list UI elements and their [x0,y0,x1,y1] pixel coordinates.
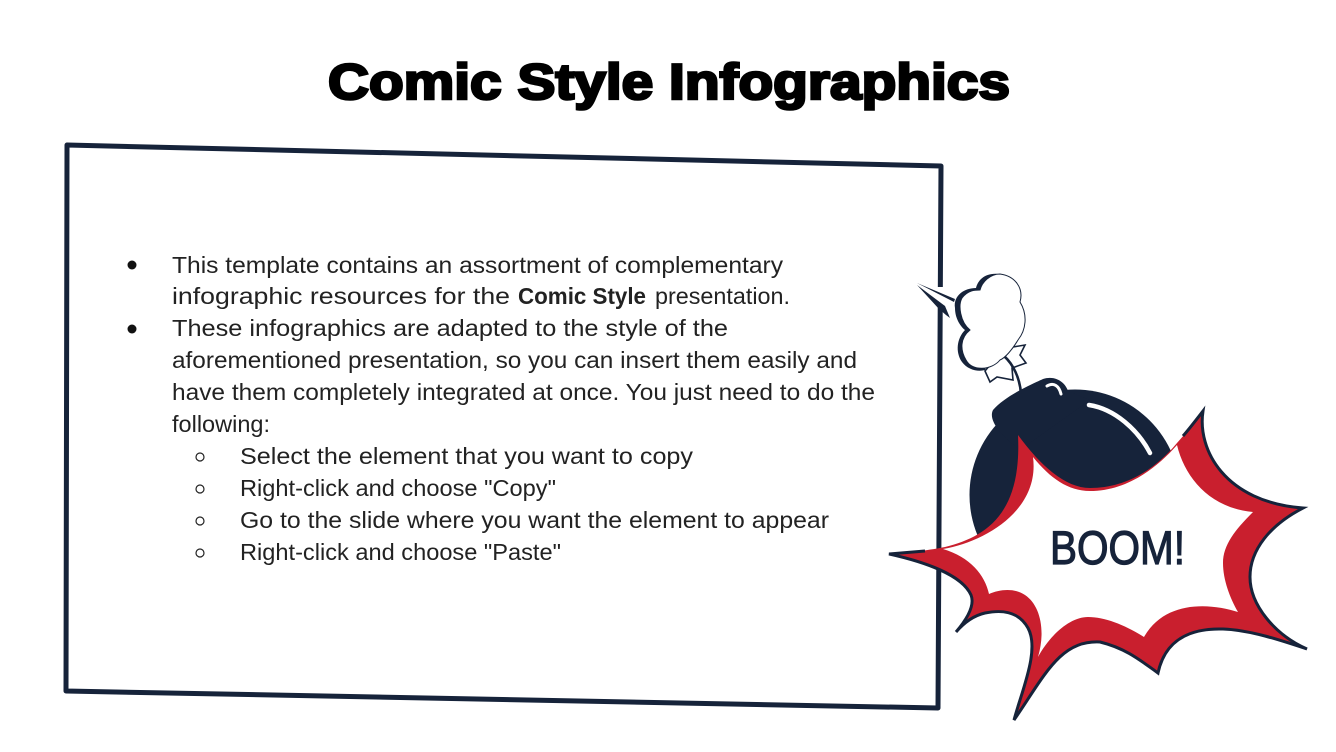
bullet 2 line 3: have them completely integrated at once. You just need to do the [172,379,875,405]
bullet 2 line 2: aforementioned presentation, so you can insert them easily and [172,347,857,373]
bullet 1 [128,260,136,270]
bullet 2 [128,324,136,334]
sub bullet 1: Select the element that you want to copy [240,443,694,469]
icon: fuse [1004,356,1021,394]
icon: smoke cloud [955,274,1025,371]
highlight: body [1089,405,1150,453]
icon: bomb body [970,378,1180,600]
bullet 1 line 1: This template contains an assortment of complementary [172,252,784,278]
bullet 2 line 4: following: [172,411,270,437]
explosion burst: white centre [943,445,1253,657]
sub bullet 2: Right-click and choose "Copy" [240,475,556,501]
icon: spark lines [917,283,955,318]
bullet 1 line 2: presentation. [655,283,790,309]
panel: text frame [66,145,941,708]
explosion burst: dark outline [889,411,1307,720]
explosion burst: red shape [889,411,1307,720]
bullet 1 line 2 [172,283,790,309]
highlight: cap [1047,384,1061,394]
bullet 2 line 1: These infographics are adapted to the style of the [172,315,728,341]
title: Comic Style Infographics [328,54,1010,110]
sub bullet 3: Go to the slide where you want the element to appear [240,507,829,533]
text block: instructions [128,252,875,565]
icon: bomb with explosion [889,274,1307,720]
bullet 1 line 2: infographic resources for the [172,283,510,309]
label: BOOM!: BOOM! [1050,521,1185,574]
icon: fuse spark [985,345,1026,382]
sub bullet 4: Right-click and choose "Paste" [240,539,561,565]
bullet 1 line 2: Comic Style [518,283,646,309]
